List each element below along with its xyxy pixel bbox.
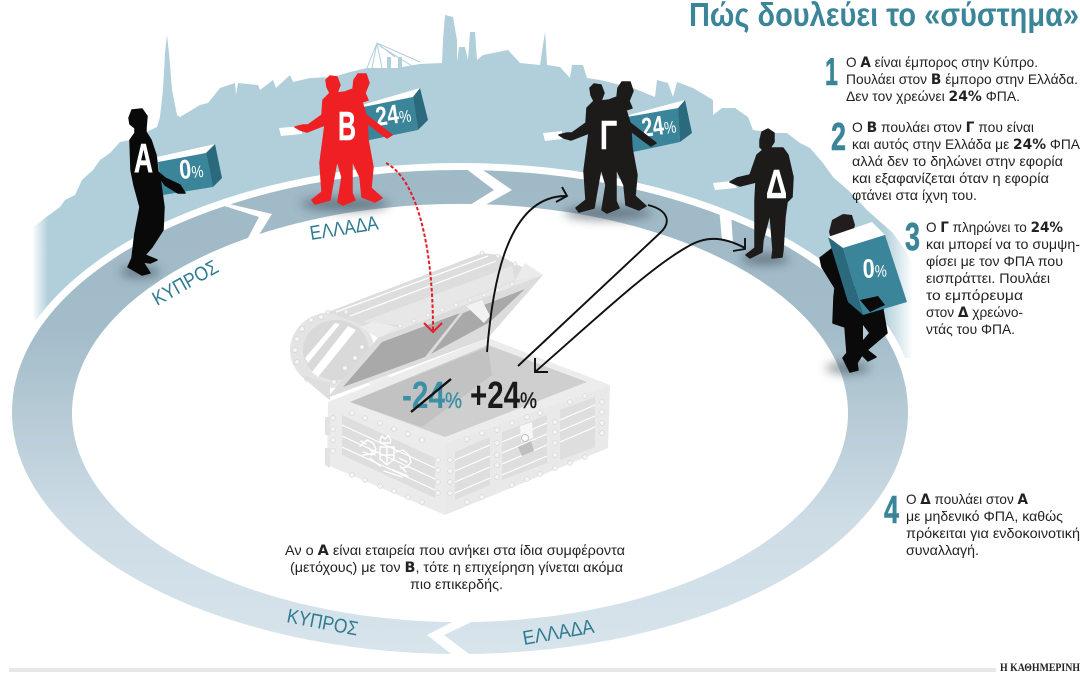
step 3: 3: [905, 216, 920, 259]
plus 24 percent: +24: [470, 375, 520, 417]
step 2: φτάνει στα ίχνη του.: [852, 187, 977, 203]
step 3: στον Δ χρεώνο-: [926, 304, 1023, 321]
step 1: Πουλάει στον Β έμπορο στην Ελλάδα.: [846, 71, 1078, 88]
step 3: φίσει με τον ΦΠΑ που: [926, 253, 1063, 269]
chest interior: [350, 345, 587, 437]
men Γ: Γ: [600, 112, 617, 158]
man A: Α: [134, 135, 153, 181]
back box: [828, 222, 907, 315]
treasure chest: [290, 251, 610, 515]
box carried by A: 0: [178, 154, 192, 185]
men B: [295, 74, 392, 205]
step 4: πρόκειται για ενδοκοινοτική: [906, 525, 1080, 541]
box with 24 percent for Γ: 24: [640, 110, 666, 143]
step 4: [884, 489, 1080, 558]
white band around ring: [4, 163, 916, 661]
chest left face: [327, 402, 445, 515]
line Γ to chest: [518, 205, 667, 366]
men Γ: [559, 82, 656, 213]
arrow chest to Γ: [487, 187, 567, 352]
step 3: εισπράττει. Πουλάει: [926, 270, 1050, 286]
plus 24 percent: %: [520, 388, 537, 413]
man Δ: Δ: [766, 161, 787, 207]
strike-through: [411, 379, 451, 412]
flow arrows: [487, 187, 745, 372]
step 2: [831, 116, 1080, 203]
back box: %: [874, 262, 887, 281]
step 3: και μπορεί να το συμψη-: [926, 236, 1080, 252]
centre note: πιο επικερδής.: [410, 576, 503, 592]
chest rim: [328, 338, 610, 443]
minus 24 percent: -24: [402, 375, 445, 417]
chest plank lines: [342, 405, 595, 493]
step 3: [905, 216, 1080, 337]
skyline background: [32, 15, 913, 365]
step 2: Ο Β πουλάει στον Γ που είναι: [852, 119, 1034, 136]
man carrying box on his back: [820, 214, 907, 372]
feet shadows: [120, 197, 870, 374]
paper held by Δ: [713, 181, 737, 190]
chest lid rivet band: [378, 275, 543, 342]
red dashed arrow: [386, 163, 442, 332]
step 3: ντάς του ΦΠΑ.: [926, 321, 1015, 337]
step 3: το εμπόρευμα: [926, 287, 1023, 303]
box with 24 percent for B: [362, 88, 428, 141]
box carried by A: %: [191, 162, 204, 182]
back box: 0: [862, 254, 875, 284]
chest rivets: [326, 251, 604, 504]
centre note: [285, 542, 625, 592]
footer bar: [9, 668, 996, 672]
box carried by A: [157, 144, 222, 195]
circular route ring: [12, 170, 908, 654]
centre note: (μετόχους) με τον Β, τότε η επιχείρηση γίνεται ακόμα: [290, 559, 623, 576]
chest lid end caps: [360, 322, 398, 338]
step 1: Δεν τον χρεώνει 24% ΦΠΑ.: [846, 88, 1020, 105]
paper held by Γ: [543, 131, 562, 141]
step 3: Ο Γ πληρώνει το 24%: [926, 219, 1063, 236]
chest tabs: [325, 417, 330, 468]
step 1: 1: [825, 51, 838, 94]
route labels: [149, 212, 596, 650]
step 1: Ο Α είναι έμπορος στην Κύπρο.: [846, 54, 1038, 71]
step 2: και εξαφανίζεται όταν η εφορία: [852, 170, 1049, 186]
box with 24 percent for Γ: [625, 100, 692, 152]
label: Cyprus top: ΚΥΠΡΟΣ: [149, 256, 222, 310]
label: Greece top: ΕΛΛΑΔΑ: [308, 212, 380, 245]
box with 24 percent for B: %: [398, 106, 412, 127]
label: Cyprus bottom: ΚΥΠΡΟΣ: [285, 605, 360, 641]
chest lock: [518, 422, 534, 456]
man Δ: [730, 129, 793, 258]
step 4: 4: [884, 489, 899, 532]
box with 24 percent for Γ: %: [663, 117, 677, 138]
chest lid inside: [327, 275, 543, 398]
step 4: Ο Δ πουλάει στον Α: [906, 491, 1028, 508]
centre note: Αν ο Α είναι εταιρεία που ανήκει στα ίδια συμφέροντα: [285, 542, 625, 559]
balance figures: [402, 375, 537, 417]
minus 24 percent: %: [445, 388, 462, 413]
chest lid cover: [328, 253, 543, 338]
chest crest: [360, 436, 411, 477]
box with 24 percent for B: 24: [374, 99, 401, 132]
step 2: και αυτός στην Ελλάδα με 24% ΦΠΑ: [852, 136, 1080, 153]
step 1: [825, 51, 1078, 105]
paper held by B: [279, 126, 302, 136]
step 4: με μηδενικό ΦΠΑ, καθώς: [906, 508, 1063, 524]
chest right face: [445, 385, 610, 515]
man A: [128, 109, 185, 275]
men B: Β: [338, 103, 356, 149]
route dividers: [215, 168, 733, 657]
chest panels: [342, 397, 595, 500]
chest lid arch end: [290, 312, 374, 400]
arrow Δ and chest: [535, 238, 745, 372]
step 4: συναλλαγή.: [906, 542, 979, 558]
step 2: 2: [831, 116, 846, 159]
label: Greece bottom: ΕΛΛΑΔΑ: [521, 616, 596, 650]
step 2: αλλά δεν το δηλώνει στην εφορία: [852, 153, 1063, 169]
